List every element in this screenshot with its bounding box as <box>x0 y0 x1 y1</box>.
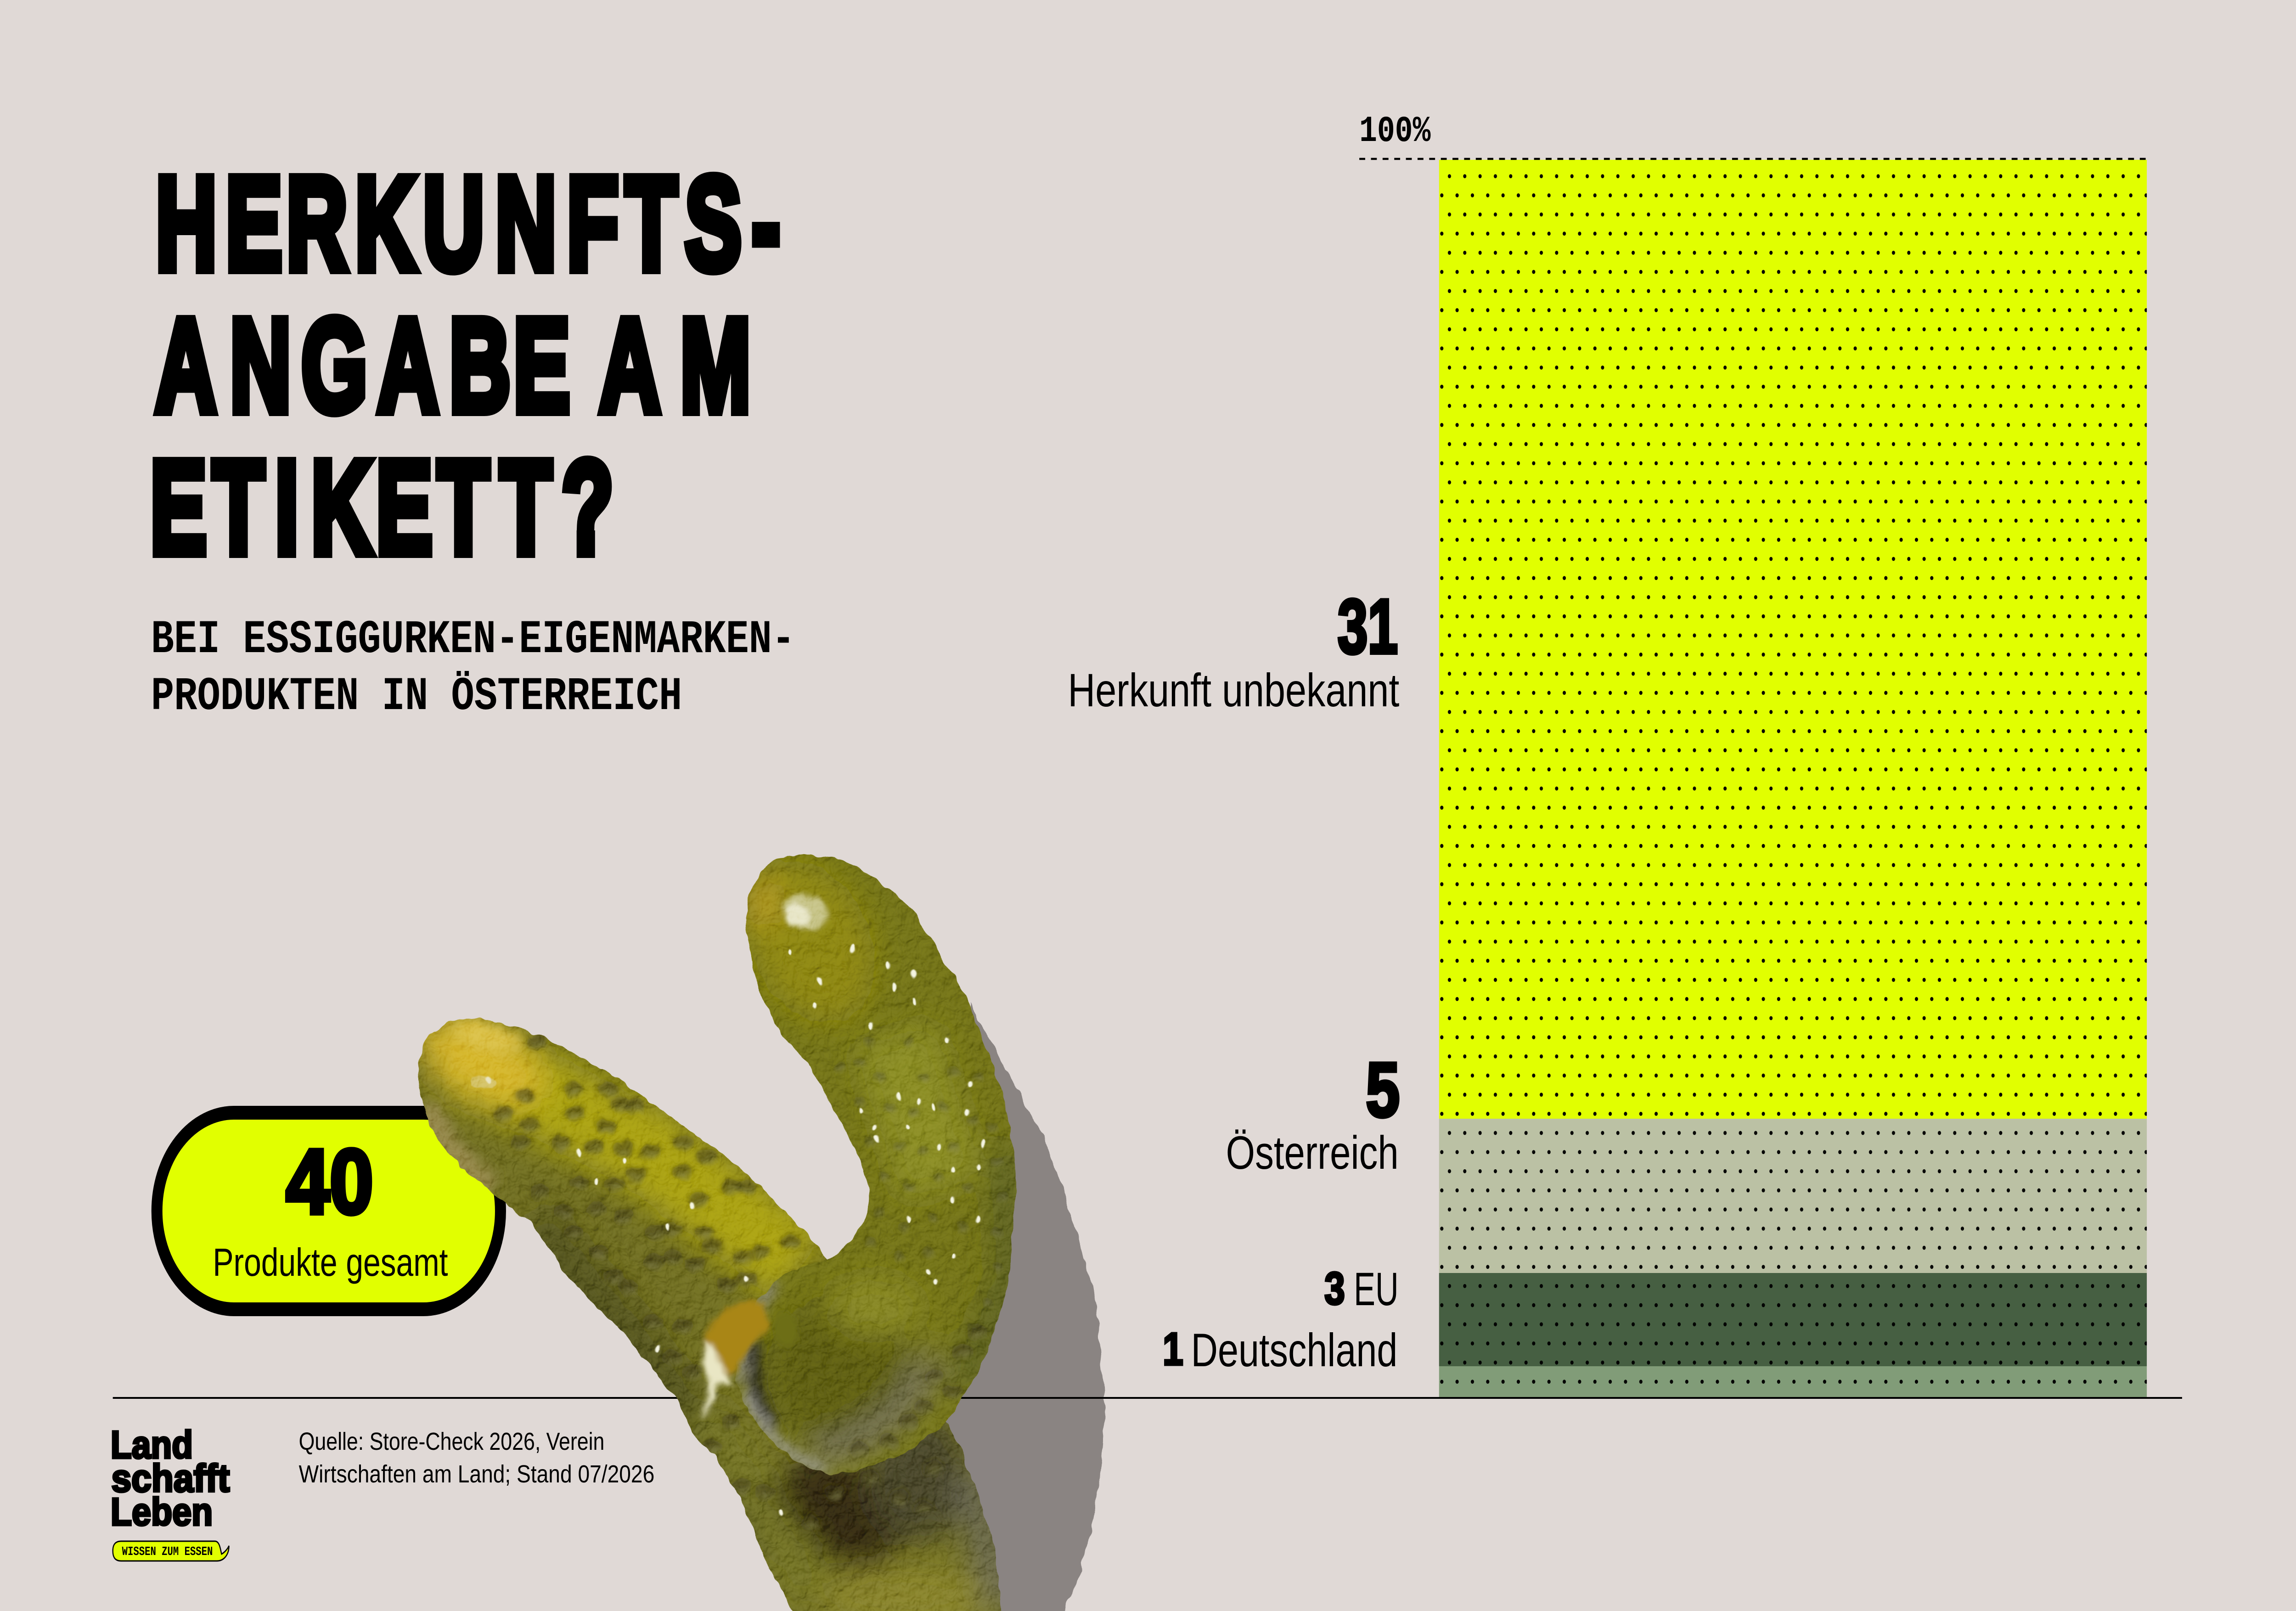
label: 31 Herkunft unbekannt <box>1068 584 1399 716</box>
label: 3 EU: 3 <box>1324 1263 1345 1314</box>
pickle: lower diagonal gherkin <box>418 1017 1001 1611</box>
title: HERKUNFTS- <box>156 150 780 298</box>
logo: Land schafft Leben: Land <box>111 1424 193 1467</box>
logo: Land schafft Leben: Leben <box>111 1491 213 1534</box>
baseline rule <box>113 1397 2182 1399</box>
label: 5 Österreich <box>1226 1047 1400 1179</box>
title: ETIKETT? <box>150 434 613 581</box>
image: pickles <box>397 839 1037 1611</box>
subtitle: BEI ESSIGGURKEN-EIGENMARKEN- <box>151 613 795 666</box>
source note: Quelle: Store-Check 2026, Verein <box>299 1428 604 1455</box>
label: 3 EU: EU <box>1354 1262 1399 1315</box>
label: 3 EU <box>1324 1262 1399 1315</box>
label: 1 Deutschland: 1 <box>1163 1324 1183 1375</box>
source note <box>299 1428 654 1488</box>
segment: Herkunft unbekannt <box>1439 160 2147 1119</box>
logo tag: Wissen zum Essen: WISSEN ZUM ESSEN <box>122 1545 213 1559</box>
total badge: 40 Produkte gesamt: Produkte gesamt <box>213 1241 448 1284</box>
pickle stem tuft <box>698 1302 798 1420</box>
dot pattern overlay <box>1439 160 2147 1397</box>
segment: Österreich <box>1439 1119 2147 1273</box>
label: 31 Herkunft unbekannt: Herkunft unbekannt <box>1068 664 1399 716</box>
segment: Deutschland <box>1439 1366 2147 1397</box>
chart: stacked bar of 40 products <box>1439 160 2147 1397</box>
label: 5 Österreich: Österreich <box>1226 1126 1399 1179</box>
label: 1 Deutschland: Deutschland <box>1191 1324 1397 1376</box>
title: ANGABE AM <box>155 292 751 439</box>
subtitle <box>151 613 795 723</box>
100% marker: 100% <box>1359 111 1431 152</box>
total badge: 40 Produkte gesamt <box>157 1113 501 1309</box>
logo: Land schafft Leben: schafft <box>111 1457 230 1500</box>
pickle: upper bent gherkin <box>735 854 1017 1476</box>
segment: EU <box>1439 1273 2147 1366</box>
label: 31 Herkunft unbekannt: 31 <box>1338 584 1398 670</box>
shadow of the pickles <box>900 1001 1105 1611</box>
title <box>150 150 780 581</box>
label: 5 Österreich: 5 <box>1366 1047 1400 1133</box>
subtitle: PRODUKTEN IN ÖSTERREICH <box>151 670 682 723</box>
total badge: 40 Produkte gesamt: 40 <box>286 1131 373 1233</box>
source note: Wirtschaften am Land; Stand 07/2026 <box>299 1461 654 1488</box>
logo: Land schafft Leben <box>111 1424 230 1561</box>
logo tag: Wissen zum Essen <box>113 1541 229 1561</box>
